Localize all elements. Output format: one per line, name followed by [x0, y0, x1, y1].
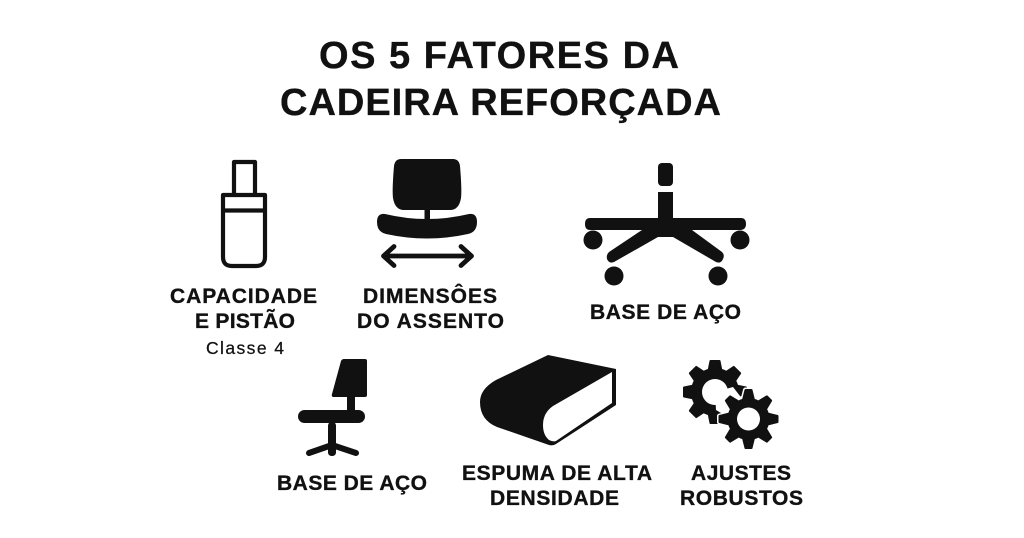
label: high-density foam: DENSIDADE — [490, 487, 619, 510]
title: CADEIRA REFORÇADA — [280, 82, 721, 124]
label: robust adjustments: AJUSTES — [691, 462, 791, 485]
factor: capacity and piston — [170, 162, 317, 358]
factor: high-density foam — [462, 355, 652, 510]
factor: robust adjustments — [680, 361, 803, 510]
label: seat dimensions: DO ASSENTO — [357, 310, 504, 333]
label: high-density foam — [462, 462, 652, 510]
label: seat dimensions — [357, 284, 504, 333]
label: robust adjustments — [680, 462, 803, 510]
label: capacity and piston: E PISTÃO — [195, 310, 295, 333]
icon: gas piston — [223, 162, 265, 266]
icon: gears — [684, 361, 778, 448]
label: steel base, office chair: BASE DE AÇO — [277, 472, 427, 495]
factor: steel base — [584, 163, 750, 324]
label: seat dimensions: DIMENSÔES — [363, 284, 497, 308]
label: capacity and piston — [170, 285, 317, 358]
label: robust adjustments: ROBUSTOS — [680, 487, 803, 510]
label: capacity and piston: CAPACIDADE — [170, 285, 317, 308]
label: capacity and piston: Classe 4 — [206, 338, 284, 358]
factor: seat dimensions — [357, 159, 504, 333]
icon: five-star chair base — [584, 163, 750, 286]
factor: steel base, office chair — [277, 359, 427, 495]
label: steel base: BASE DE AÇO — [590, 301, 741, 324]
icon: chair with width arrow — [377, 159, 477, 266]
icon: foam block — [480, 355, 616, 445]
title — [280, 35, 721, 124]
title: OS 5 FATORES DA — [319, 35, 679, 77]
label: high-density foam: ESPUMA DE ALTA — [462, 462, 652, 485]
icon: office chair — [298, 359, 367, 456]
